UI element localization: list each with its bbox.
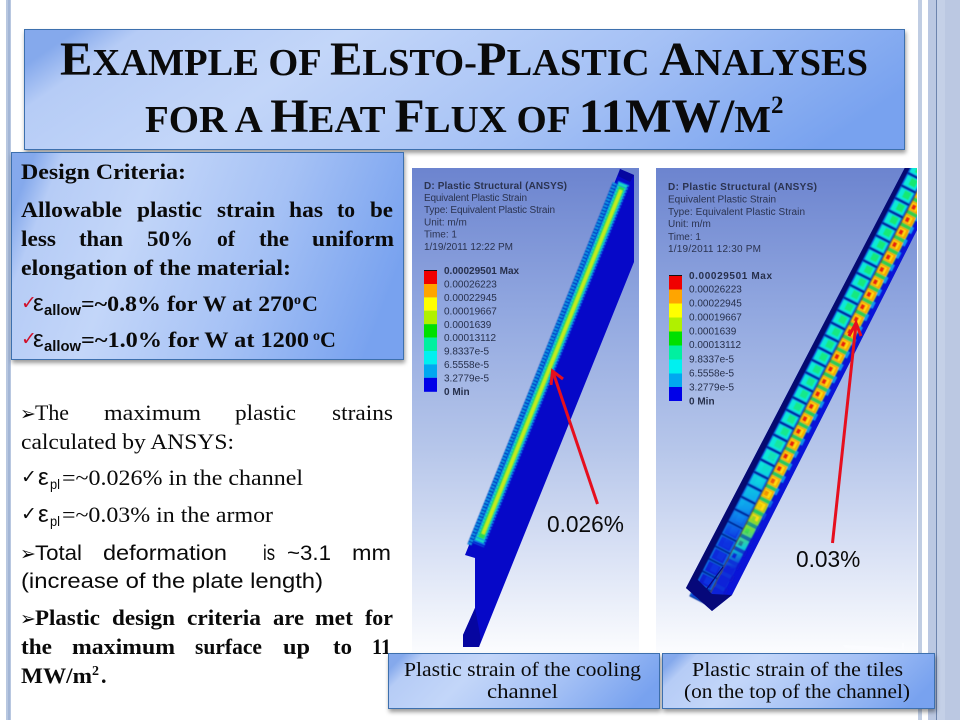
header text: Unit: m/m (424, 218, 467, 228)
bullet: total deformation: mm (352, 541, 391, 565)
colour legend: 0.00013112 (444, 333, 497, 344)
bullet: total deformation: (increase of the plate length) (21, 569, 323, 593)
criterion: W at 1200C: =~1.0% for W at 1200 (81, 327, 309, 352)
header text: Equivalent Plastic Strain (424, 193, 527, 204)
sub-bullet: channel strain: ε (38, 464, 49, 491)
header text (668, 182, 817, 255)
colour legend: 0.00019667 (444, 306, 497, 318)
bullet: design criteria met: are (273, 605, 304, 630)
criteria statement: be (370, 197, 393, 222)
criterion: W at 1200C: o (313, 329, 320, 344)
model: tiles (686, 168, 917, 611)
bullet: design criteria met: to (333, 634, 352, 659)
criterion: W at 1200C: ✓ (21, 328, 37, 350)
bullet: maximum plastic strains: ➢ (20, 403, 36, 425)
bullet: design criteria met: criteria (187, 605, 261, 630)
bullet: maximum plastic strains: maximum (104, 400, 201, 425)
bullet: total deformation: deformation (103, 541, 227, 565)
sub-bullet: armor strain (21, 501, 274, 529)
criteria statement: of (217, 226, 236, 251)
figure: plastic strain of the cooling channel (412, 168, 639, 652)
title text (60, 33, 868, 143)
caption: cooling channel: Plastic strain of the cooling (404, 659, 641, 681)
arrow: tile strain (832, 323, 861, 543)
figure: plastic strain of the tiles (656, 168, 917, 640)
white artefact (843, 643, 904, 653)
bullet: design criteria met: met (315, 605, 354, 630)
bullet: total deformation: ➢ (20, 543, 36, 565)
bullet: design criteria met (20, 605, 393, 688)
header text: D: Plastic Structural (ANSYS) (668, 182, 817, 193)
criterion: W at 1200C: C (320, 327, 336, 352)
criteria statement: plastic (137, 197, 202, 222)
criterion: W at 1200C: ε (33, 326, 44, 353)
colour legend: 0 Min (689, 396, 715, 408)
sub-bullet: armor strain: pl (50, 514, 60, 529)
criterion: W at 1200C (21, 326, 336, 355)
colour legend: 0.0001639 (444, 320, 492, 331)
arrow: channel strain (551, 371, 598, 504)
bullet: design criteria met: up (283, 634, 310, 659)
header text: Time: 1 (424, 230, 457, 240)
model: cooling channel (463, 169, 634, 647)
panel: design criteria (12, 152, 404, 360)
colour legend: 0.00026223 (689, 284, 742, 296)
title text: EXAMPLE OF ELSTO-PLASTIC ANALYSES (60, 33, 868, 86)
header text: 1/19/2011 12:30 PM (668, 244, 761, 255)
colour legend: 3.2779e-5 (444, 374, 489, 384)
colour legend: 0 Min (444, 387, 470, 398)
sub-bullet: channel strain: ✓ (21, 466, 37, 488)
criteria statement: strain (217, 197, 275, 222)
title text: 2 (771, 92, 784, 119)
header text: 1/19/2011 12:22 PM (424, 242, 513, 253)
bullet: total deformation: Total (35, 541, 82, 565)
header text: D: Plastic Structural (ANSYS) (424, 181, 567, 192)
caption: tiles: (on the top of the channel) (684, 681, 910, 703)
bullet: maximum plastic strains: calculated by ANSYS: (21, 429, 234, 454)
colour legend: 0.00029501 Max (689, 271, 772, 282)
criteria statement: uniform (312, 226, 394, 251)
criterion: W at 270C: =~0.8% for W at 270 (81, 291, 294, 316)
colour legend: 0.00026223 (444, 280, 497, 290)
sub-bullet: channel strain: pl (50, 477, 60, 492)
criteria statement: less (21, 226, 56, 251)
title text: FOR A HEAT FLUX OF 11MW/M (145, 90, 771, 143)
colour legend: 0.00022945 (444, 293, 497, 304)
colour legend: 9.8337e-5 (689, 354, 734, 366)
criteria statement: elongation of the material: (21, 255, 291, 280)
bullet: design criteria met: MW/m (21, 663, 92, 688)
criterion: W at 270C: ✓ (21, 292, 37, 314)
criteria statement (21, 197, 394, 280)
bullet: maximum plastic strains: strains (332, 400, 393, 425)
caption: tiles: Plastic strain of the tiles (692, 659, 903, 681)
caption: cooling channel: channel (487, 681, 559, 703)
criteria statement: than (79, 226, 123, 251)
bullet: design criteria met: ➢ (20, 608, 36, 630)
header text (424, 181, 567, 253)
bullet: design criteria met: . (101, 663, 106, 688)
header text: Time: 1 (668, 232, 701, 243)
value label: 0.03%: 0.03% (796, 546, 860, 572)
criteria statement: Allowable (21, 197, 122, 222)
bullet: total deformation: ~3.1 (287, 541, 331, 565)
caption: tiles (662, 654, 934, 708)
bullet: design criteria met: surface (195, 634, 262, 659)
bullet: maximum plastic strains: plastic (235, 400, 296, 425)
bullet: maximum plastic strains (20, 400, 393, 454)
bullet: design criteria met: Plastic (35, 605, 100, 630)
colour legend: 0.00022945 (689, 298, 742, 310)
colour legend: 0.00029501 Max (444, 266, 520, 277)
criterion: W at 270C: C (302, 291, 318, 316)
criteria statement: has (289, 197, 323, 222)
bullet: design criteria met: 11 (372, 634, 391, 659)
bullet: design criteria met: the (21, 634, 52, 659)
sub-bullet: armor strain: ε (38, 501, 49, 528)
sub-bullet: armor strain: ✓ (21, 503, 37, 525)
criterion: W at 270C: ε (33, 290, 44, 317)
colour legend (669, 271, 772, 408)
colour legend: 0.00013112 (689, 340, 742, 351)
criterion: W at 1200C: allow (44, 339, 82, 355)
sub-bullet: channel strain (21, 464, 303, 492)
bullet: design criteria met: 2 (92, 664, 99, 679)
heading: design criteria: Design Criteria: (21, 159, 186, 184)
criteria statement: the (259, 226, 289, 251)
bullet: design criteria met: for (365, 605, 393, 630)
criterion: W at 270C: allow (44, 303, 82, 319)
colour legend: 3.2779e-5 (689, 382, 734, 394)
left side band (6, 0, 11, 720)
colour legend: 9.8337e-5 (444, 346, 489, 358)
colour legend (424, 266, 520, 398)
colour legend: 6.5558e-5 (689, 368, 734, 380)
sub-bullet: channel strain: =~0.026% in the channel (62, 465, 303, 490)
colour legend: 6.5558e-5 (444, 360, 489, 371)
sub-bullet: armor strain: =~0.03% in the armor (62, 502, 274, 527)
bullet: maximum plastic strains: The (35, 400, 69, 425)
title banner (24, 30, 904, 150)
text block: ANSYS results (20, 400, 393, 688)
header text: Type: Equivalent Plastic Strain (424, 205, 555, 216)
criterion: W at 270C (21, 290, 318, 319)
right side band (918, 0, 960, 720)
bullet: total deformation: is (263, 541, 275, 565)
colour legend: 0.00019667 (689, 312, 742, 324)
colour legend: 0.0001639 (689, 326, 737, 338)
header text: Type: Equivalent Plastic Strain (668, 207, 805, 218)
header text: Unit: m/m (668, 219, 711, 230)
value label: 0.026%: 0.026% (547, 511, 624, 537)
bullet: design criteria met: design (112, 605, 175, 630)
criteria statement: 50% (147, 226, 193, 251)
criterion: W at 270C: o (294, 293, 301, 308)
header text: Equivalent Plastic Strain (668, 194, 776, 206)
caption: cooling channel (388, 654, 660, 708)
bullet: design criteria met: maximum (72, 634, 175, 659)
bullet: total deformation (20, 541, 391, 593)
criteria statement: to (337, 197, 355, 222)
